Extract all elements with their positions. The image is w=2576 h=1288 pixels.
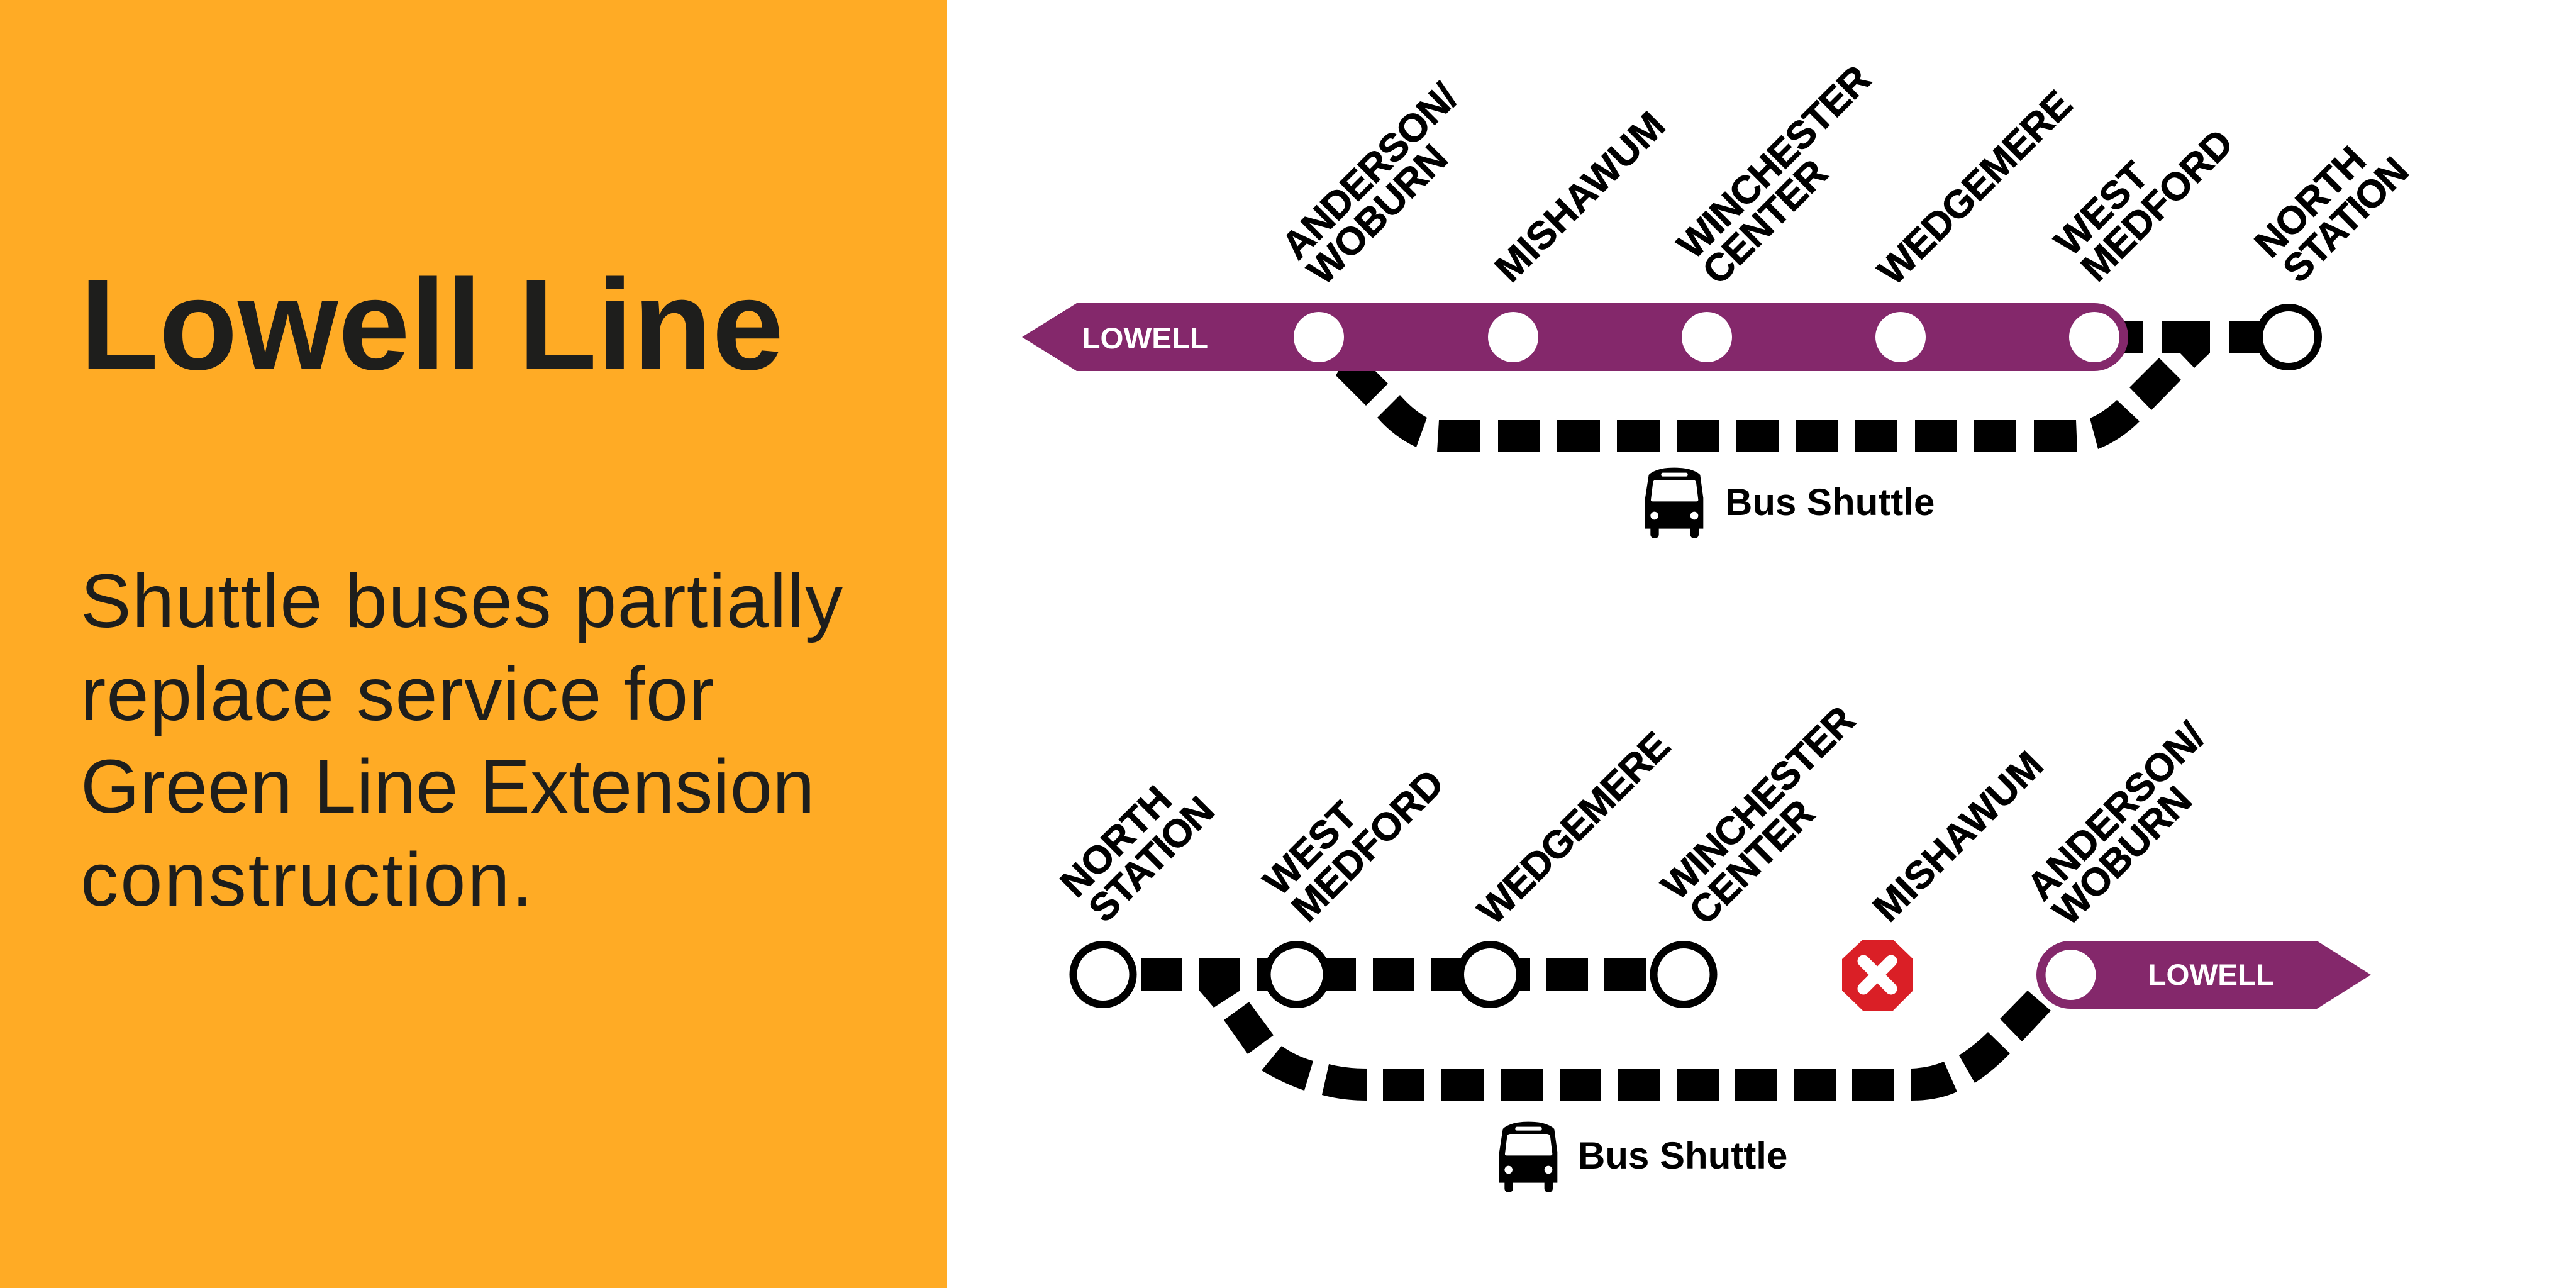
line label: Lowell: LOWELL	[1082, 322, 1208, 355]
text block: description	[80, 558, 844, 922]
station labels: CENTER	[1694, 152, 1836, 293]
station labels: WOBURN	[2045, 779, 2200, 933]
icon: closed station stop sign	[1842, 940, 1913, 1011]
station labels: NORTH	[1052, 778, 1180, 906]
station labels: NORTH	[2246, 138, 2374, 266]
purple Lowell line band with arrow	[2036, 941, 2371, 1009]
station: Anderson/Woburn	[2045, 950, 2096, 1000]
station labels: STATION	[2275, 150, 2416, 291]
station labels	[1052, 698, 2213, 933]
text block: description: Shuttle buses partially	[80, 558, 844, 643]
panel: orange sidebar	[0, 0, 947, 1288]
station labels: WEST	[1255, 793, 1366, 904]
stations on band	[1294, 312, 2119, 362]
diagram: outbound route to Lowell	[1052, 698, 2371, 1192]
station labels: MISHAWUM	[1865, 743, 2051, 930]
station labels: ANDERSON/	[2019, 714, 2213, 909]
purple Lowell line band with arrow	[1022, 303, 2128, 371]
text block: description: replace service for	[80, 651, 715, 736]
station labels: WEDGEMERE	[1870, 83, 2080, 293]
text block: description: construction.	[80, 836, 535, 922]
title: Lowell Line	[80, 253, 784, 397]
bus shuttle dashed route	[1141, 958, 2051, 1101]
station labels: MEDFORD	[2073, 121, 2241, 290]
station labels: WOBURN	[1299, 136, 1456, 293]
station labels: CENTER	[1681, 792, 1823, 933]
station: North Station ring	[2259, 308, 2318, 367]
line label: Lowell: LOWELL	[2148, 958, 2274, 992]
legend label: bus shuttle: Bus Shuttle	[1578, 1135, 1787, 1177]
station labels: WEDGEMERE	[1470, 724, 1678, 933]
station labels	[1274, 57, 2416, 293]
text block: description: Green Line Extension	[80, 743, 815, 829]
station labels: ANDERSON/	[1274, 75, 1466, 268]
legend label: bus shuttle: Bus Shuttle	[1725, 481, 1935, 523]
station labels: WINCHESTER	[1653, 698, 1863, 908]
icon: bus	[1645, 468, 1703, 538]
icon: bus	[1499, 1122, 1557, 1192]
stations: rings	[1073, 945, 1713, 1004]
station labels: WINCHESTER	[1669, 57, 1879, 267]
diagram: inbound route to North Station	[1022, 57, 2416, 538]
bus shuttle dashed route	[1336, 321, 2267, 452]
station labels: MEDFORD	[1284, 762, 1452, 930]
station labels: WEST	[2046, 153, 2157, 264]
station labels: MISHAWUM	[1487, 104, 1674, 291]
station labels: STATION	[1080, 789, 1222, 931]
